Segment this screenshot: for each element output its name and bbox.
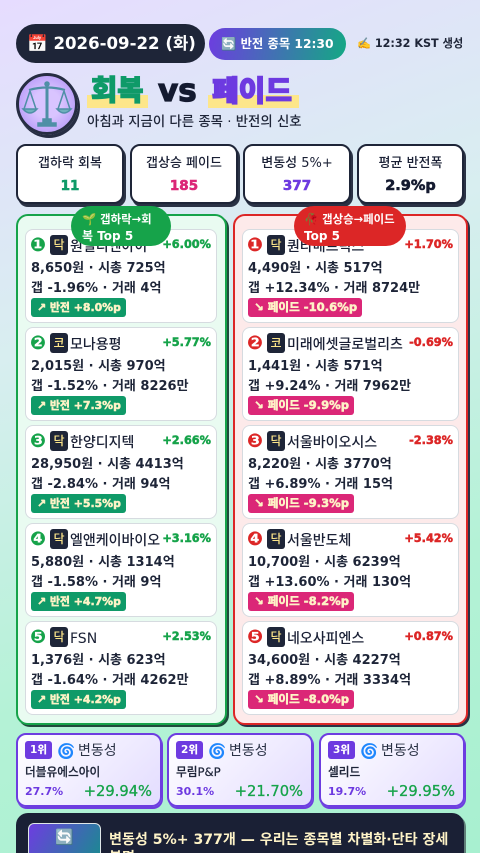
card: left 2: +5.77%: [162, 336, 211, 349]
card: right 1: +1.70%: [404, 238, 453, 251]
stat: volatility: 377: [283, 178, 311, 194]
card: right 1: ❶: [247, 234, 263, 256]
card: left 5: 닥: [53, 630, 65, 644]
rank card 2: 30.1%: [176, 785, 214, 798]
card: right 4: 서울반도체: [287, 533, 351, 549]
rank card 2: 변동성: [229, 743, 268, 759]
card: right 2: [242, 327, 459, 421]
card: left 1: [25, 229, 217, 323]
rank card 3: [319, 733, 465, 807]
title word: vs: vs: [158, 73, 197, 109]
subtitle: 아침과 지금이 다른 종목 · 반전의 신호: [87, 115, 302, 130]
card: right 4: ❹: [247, 528, 263, 550]
card: left 3: 갭 -2.84% · 거래 94억: [31, 477, 170, 492]
card: right 5: +0.87%: [404, 630, 453, 643]
card: left 4: 5,880원 · 시총 1314억: [31, 555, 175, 570]
card: left 4: ↗ 반전 +4.7%p: [37, 595, 121, 608]
card: left 5: ↗ 반전 +4.2%p: [37, 693, 121, 706]
card: right 5: ↘ 페이드 -8.0%p: [254, 692, 349, 706]
card: left 5: FSN: [70, 631, 97, 647]
card: left 4: ❹: [30, 528, 46, 550]
stat: average reversal: 2.9%p: [385, 178, 436, 194]
card: right 3: 닥: [270, 434, 282, 448]
card: left 4: +3.16%: [162, 532, 211, 545]
footer banner: [16, 813, 464, 853]
card: right 1: [242, 229, 459, 323]
card: left 2: 모나용평: [70, 337, 122, 353]
title highlight: fade: [208, 95, 299, 108]
card: right 1: 갭 +12.34% · 거래 8724만: [248, 281, 420, 296]
card: left 1: 닥: [53, 238, 65, 252]
rank card 3: 셀리드: [328, 765, 360, 779]
card: left 5: 갭 -1.64% · 거래 4262만: [31, 673, 189, 688]
card: right 2: 1,441원 · 시총 571억: [248, 359, 383, 374]
card: left 1: +6.00%: [162, 238, 211, 251]
card: right 5: 네오사피엔스: [287, 631, 364, 647]
heading pill: gap-up fade: [294, 206, 406, 246]
card: left 4: [25, 523, 217, 617]
card: right 5: ❺: [247, 626, 263, 648]
card: right 3: ❸: [247, 430, 263, 452]
rank card 3: 3위: [333, 744, 350, 756]
card: right 4: [242, 523, 459, 617]
stat: gap-up fade: [130, 144, 238, 204]
card: left 1: ❶: [30, 234, 46, 256]
stat: gap-down recovery: 11: [61, 178, 79, 194]
title word: fade: 페이드: [212, 74, 292, 108]
rank card 1: 더블유에스아이: [25, 765, 100, 779]
card: left 2: ↗ 반전 +7.3%p: [37, 399, 121, 412]
stat: gap-down recovery: [16, 144, 124, 204]
rank card 3: +29.95%: [387, 783, 455, 800]
card: right 4: 10,700원 · 시총 6239억: [248, 555, 401, 570]
rank card 1: 🌀: [57, 744, 75, 760]
card: left 5: 1,376원 · 시총 623억: [31, 653, 166, 668]
card: right 1: ↘ 페이드 -10.6%p: [254, 300, 357, 314]
footer badge: 🔄: [55, 828, 74, 846]
panel: gap-up fade: [233, 214, 468, 725]
rank card 2: [167, 733, 313, 807]
card: left 2: ❷: [30, 332, 46, 354]
rank card 1: 27.7%: [25, 785, 63, 798]
date pill: 📅 2026-09-22 (화): [27, 34, 196, 53]
card: left 4: 닥: [53, 532, 65, 546]
reversal time pill: [209, 28, 346, 60]
panel: gap-down recovery: [16, 214, 227, 725]
card: left 4: 엘앤케이바이오: [70, 533, 160, 549]
stat: average reversal: 평균 반전폭: [379, 156, 442, 171]
card: left 3: +2.66%: [162, 434, 211, 447]
stat: volatility: [243, 144, 351, 204]
generated time: ✍️ 12:32 KST 생성: [357, 37, 463, 50]
card: left 2: 갭 -1.52% · 거래 8226만: [31, 379, 189, 394]
rank card 2: 무림P&P: [176, 765, 221, 779]
card: right 4: ↘ 페이드 -8.2%p: [254, 594, 349, 608]
card: right 1: 4,490원 · 시총 517억: [248, 261, 383, 276]
card: right 1: 퀀타매트릭스: [287, 239, 364, 255]
stat: gap-up fade: 갭상승 페이드: [146, 156, 222, 171]
rank card 1: 1위: [30, 744, 47, 756]
heading pill: gap-up fade: 🥀 갭상승→페이드: [304, 212, 395, 226]
card: right 5: 34,600원 · 시총 4227억: [248, 653, 401, 668]
card: right 4: 닥: [270, 532, 282, 546]
stat: gap-up fade: 185: [170, 178, 198, 194]
rank card 3: 변동성: [381, 743, 420, 759]
rank card 3: 🌀: [360, 744, 378, 760]
reversal time pill: 🔄 반전 종목 12:30: [221, 37, 334, 51]
card: left 3: ↗ 반전 +5.5%p: [37, 497, 121, 510]
card: left 2: 2,015원 · 시총 970억: [31, 359, 166, 374]
date pill: [16, 24, 205, 63]
card: left 5: ❺: [30, 626, 46, 648]
icon: balance scale: [16, 73, 78, 135]
card: right 3: 갭 +6.89% · 거래 15억: [248, 477, 393, 492]
card: right 3: [242, 425, 459, 519]
card: left 3: 한양디지텍: [70, 435, 134, 451]
card: left 1: 원일티엔아이: [70, 239, 147, 255]
stat: volatility: 변동성 5%+: [261, 156, 333, 171]
card: right 1: 닥: [270, 238, 282, 252]
card: right 2: ❷: [247, 332, 263, 354]
card: right 5: 갭 +8.89% · 거래 3334억: [248, 673, 411, 688]
card: right 2: 미래에셋글로벌리츠: [287, 337, 403, 353]
stat: gap-down recovery: 갭하락 회복: [38, 156, 102, 171]
card: left 1: 갭 -1.96% · 거래 4억: [31, 281, 161, 296]
card: left 5: +2.53%: [162, 630, 211, 643]
heading pill: gap-down recovery: 🌱 갭하락→회: [82, 212, 152, 226]
card: right 3: ↘ 페이드 -9.3%p: [254, 496, 349, 510]
card: right 4: 갭 +13.60% · 거래 130억: [248, 575, 411, 590]
card: right 4: +5.42%: [404, 532, 453, 545]
footer badge: [28, 823, 101, 853]
rank card 2: 🌀: [208, 744, 226, 760]
title word: recovery: 회복: [91, 74, 143, 107]
stat: average reversal: [357, 144, 464, 204]
rank card 2: 2위: [181, 744, 198, 756]
card: left 2: 코: [53, 336, 65, 350]
card: right 3: -2.38%: [409, 434, 453, 447]
card: right 5: 닥: [270, 630, 282, 644]
rank card 1: 변동성: [78, 743, 117, 759]
card: left 4: 갭 -1.58% · 거래 9억: [31, 575, 161, 590]
card: right 3: 8,220원 · 시총 3770억: [248, 457, 392, 472]
card: right 5: [242, 621, 459, 715]
card: right 3: 서울바이오시스: [287, 435, 377, 451]
card: right 2: 코: [270, 336, 282, 350]
card: right 2: ↘ 페이드 -9.9%p: [254, 398, 349, 412]
rank card 1: [16, 733, 162, 807]
title: [87, 73, 299, 109]
rank card 2: +21.70%: [235, 783, 303, 800]
card: left 2: [25, 327, 217, 421]
card: left 3: 닥: [53, 434, 65, 448]
heading pill: gap-down recovery: [71, 206, 171, 246]
card: left 1: ↗ 반전 +8.0%p: [37, 301, 121, 314]
card: left 3: 28,950원 · 시총 4413억: [31, 457, 184, 472]
card: left 3: ❸: [30, 430, 46, 452]
card: left 5: [25, 621, 217, 715]
rank card 3: 19.7%: [328, 785, 366, 798]
heading pill: gap-up fade: Top 5: [304, 229, 340, 243]
title highlight: recovery: [87, 95, 148, 108]
heading pill: gap-down recovery: 복 Top 5: [82, 229, 133, 243]
rank card 1: +29.94%: [84, 783, 152, 800]
card: left 1: 8,650원 · 시총 725억: [31, 261, 166, 276]
card: right 2: -0.69%: [409, 336, 453, 349]
card: left 3: [25, 425, 217, 519]
card: right 2: 갭 +9.24% · 거래 7962만: [248, 379, 411, 394]
